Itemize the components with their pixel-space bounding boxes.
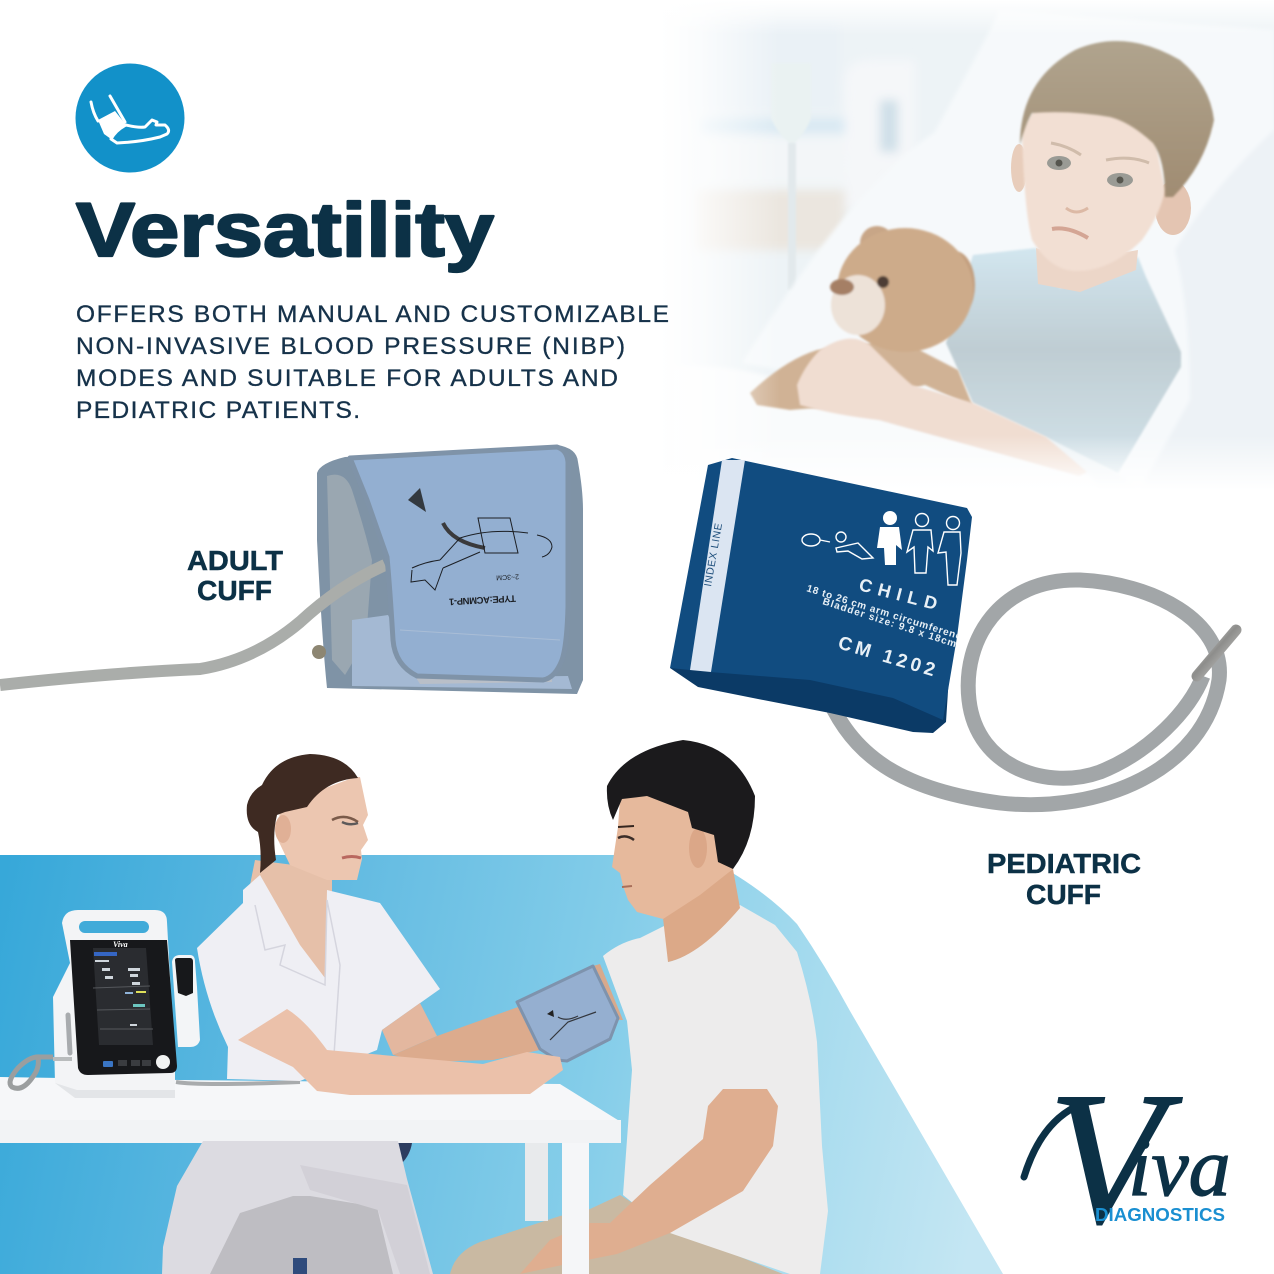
control buttons bbox=[103, 1061, 113, 1067]
cuff front flap bbox=[350, 447, 568, 680]
cuff text: CM 1202 bbox=[836, 633, 937, 681]
photo fades bbox=[660, 16, 772, 464]
side port bbox=[68, 1015, 70, 1053]
nurse forearm and hand bbox=[238, 1009, 563, 1095]
patient head bbox=[612, 790, 733, 919]
patient neck bbox=[663, 869, 740, 962]
cuff underside bbox=[670, 650, 950, 733]
patient arm bbox=[520, 1089, 778, 1274]
body text: MODES AND SUITABLE FOR ADULTS AND bbox=[76, 365, 618, 392]
label: adult cuff bbox=[187, 545, 283, 606]
label: pediatric cuff bbox=[987, 848, 1141, 910]
cuff text: CHILD bbox=[857, 575, 939, 614]
teddy bear bbox=[750, 226, 975, 410]
cuff text bbox=[806, 579, 958, 676]
monitor hose bbox=[10, 1057, 53, 1088]
patient trousers bbox=[450, 1195, 783, 1274]
nurse hair bbox=[247, 754, 358, 873]
icon: arm with cuff in blue circle bbox=[76, 64, 184, 172]
label: adult cuff: ADULT bbox=[187, 545, 283, 576]
cuff back layer bbox=[317, 445, 583, 694]
table bbox=[0, 1077, 621, 1274]
cuff print: arm diagram bbox=[408, 488, 552, 590]
white index strip bbox=[690, 460, 745, 672]
pillow and bed bbox=[741, 32, 1270, 456]
nurse lower coat bbox=[162, 1141, 433, 1274]
cuff print text: TYPE:ACMNP-1 bbox=[448, 592, 516, 607]
metal connector bbox=[312, 645, 326, 659]
cuff front bbox=[670, 458, 972, 720]
side probe bbox=[172, 955, 200, 1047]
label: pediatric cuff: CUFF bbox=[1026, 879, 1101, 910]
child's head bbox=[1011, 41, 1214, 271]
patient lower body bbox=[450, 740, 828, 1274]
body text bbox=[76, 301, 669, 424]
screen bezel bbox=[70, 940, 177, 1075]
screen bbox=[93, 948, 153, 1045]
body text: PEDIATRIC PATIENTS. bbox=[76, 397, 360, 424]
handle opening bbox=[79, 921, 149, 933]
patient icons bbox=[802, 511, 961, 585]
neck bbox=[1036, 248, 1138, 292]
monitor body bbox=[53, 910, 175, 1098]
logo: Viva Diagnostics: V bbox=[1048, 1054, 1183, 1264]
body text: OFFERS BOTH MANUAL AND CUSTOMIZABLE bbox=[76, 301, 669, 328]
brand mark on bezel: Viva bbox=[113, 940, 128, 949]
patient forearm and blood pressure cuff bbox=[382, 964, 623, 1062]
label: adult cuff: CUFF bbox=[197, 575, 272, 606]
pediatric cuff photo bbox=[670, 458, 1236, 805]
nurse neck bbox=[250, 860, 332, 985]
heading: Versatility: Versatility bbox=[76, 188, 494, 273]
nurse coat bbox=[197, 875, 440, 1081]
hose bbox=[825, 580, 1219, 805]
patient shirt bbox=[603, 905, 828, 1274]
label: pediatric cuff: PEDIATRIC bbox=[987, 848, 1141, 879]
body text: NON-INVASIVE BLOOD PRESSURE (NIBP) bbox=[76, 333, 625, 360]
blue background shape bbox=[0, 855, 1003, 1274]
vital signs monitor bbox=[10, 910, 300, 1098]
logo: Viva Diagnostics bbox=[1024, 1054, 1231, 1264]
logo: Viva Diagnostics: DIAGNOSTICS bbox=[1095, 1205, 1225, 1225]
cuff label: index line: INDEX LINE bbox=[702, 522, 725, 588]
adult cuff photo bbox=[0, 445, 583, 694]
nurse head bbox=[278, 777, 368, 880]
patient hair bbox=[607, 740, 755, 869]
shirt bbox=[946, 248, 1181, 473]
chair bbox=[397, 1143, 412, 1163]
cuff text: Bladder size: 9.8 x 18cm bbox=[821, 596, 958, 650]
small cuff on arm bbox=[517, 966, 618, 1061]
metal connector bbox=[1197, 630, 1236, 676]
cuff tube bbox=[0, 565, 385, 685]
adult cuff photo: 2~3CM bbox=[496, 572, 519, 581]
cuff text: 18 to 26 cm arm circumference bbox=[805, 583, 969, 645]
photo: child in hospital bed with teddy bear bbox=[703, 15, 1274, 476]
IV bag and stand bbox=[774, 119, 809, 286]
logo: Viva Diagnostics: iva bbox=[1128, 1121, 1231, 1214]
nurse bbox=[162, 754, 440, 1274]
child's arm and hand bbox=[797, 339, 1087, 476]
